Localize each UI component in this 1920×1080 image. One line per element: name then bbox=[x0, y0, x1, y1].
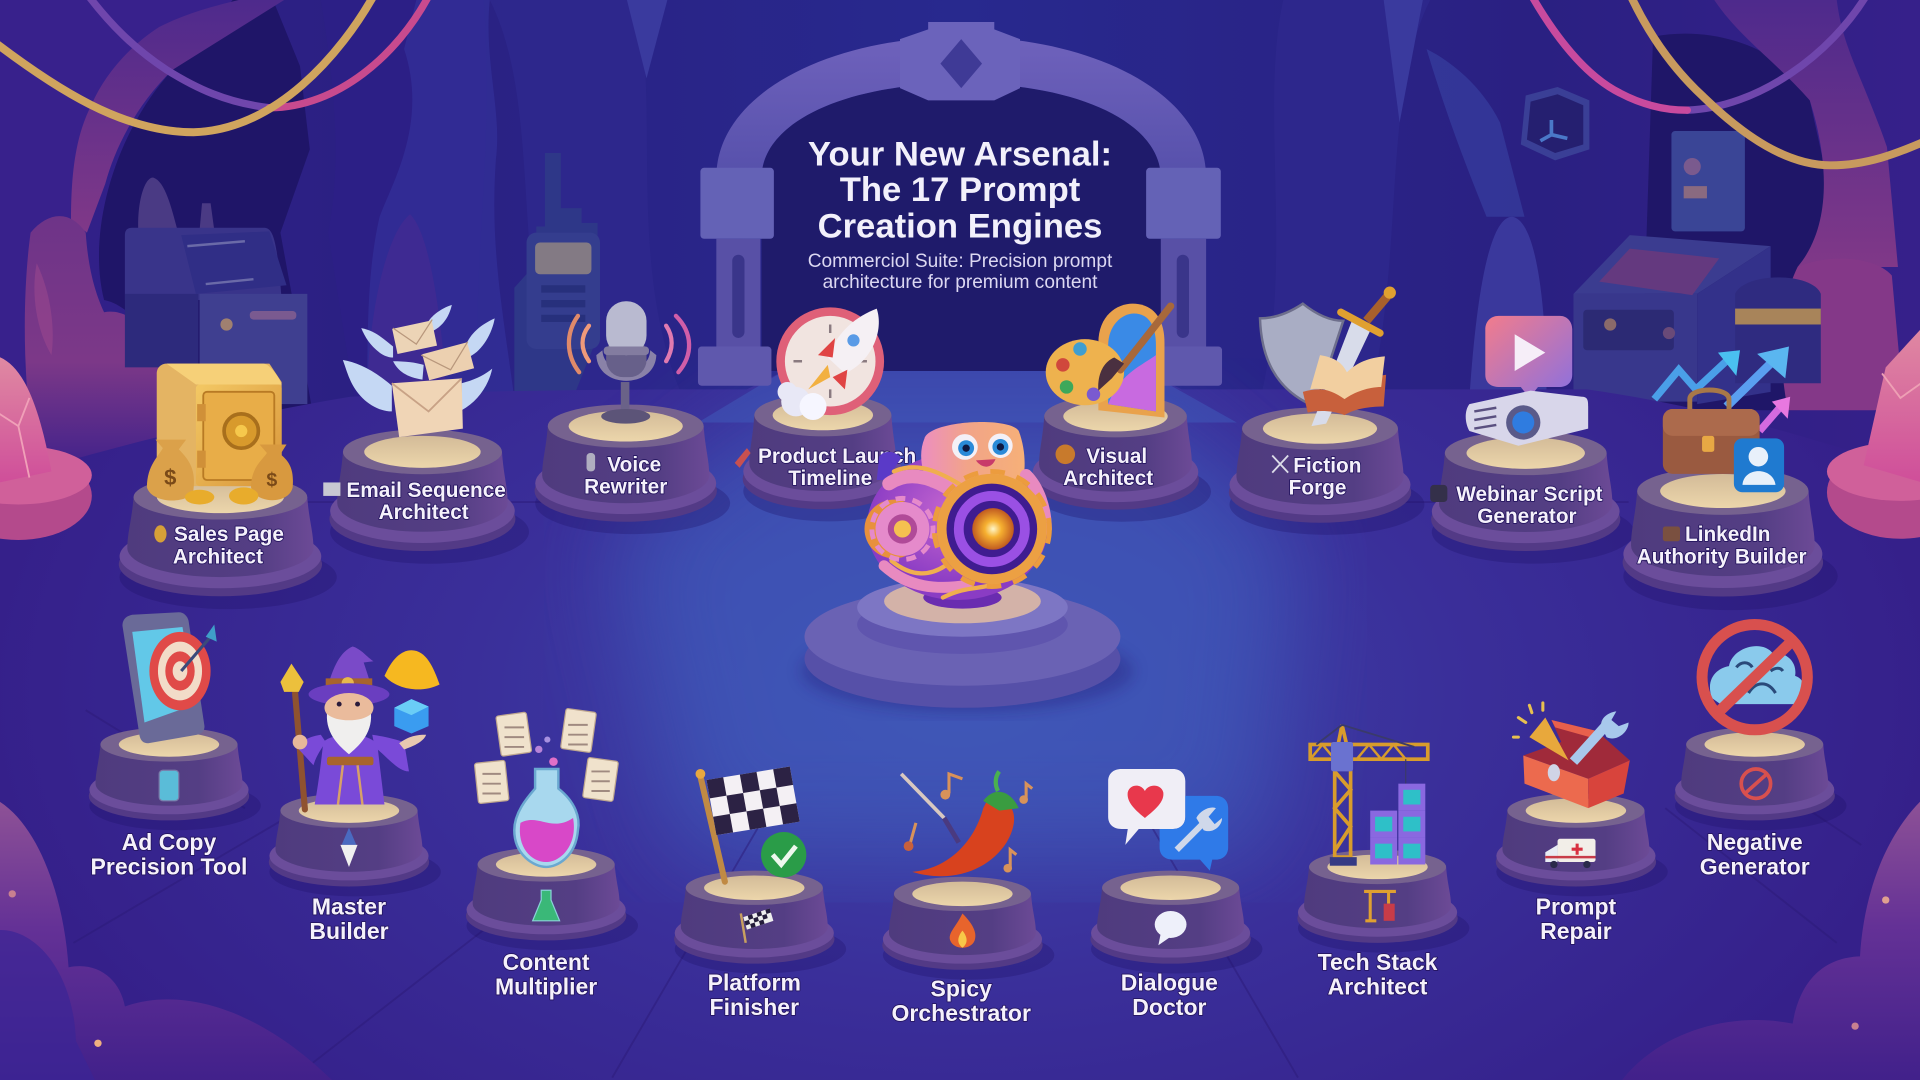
pedestal bbox=[1674, 727, 1847, 830]
hanging cables right bbox=[1531, 0, 1920, 165]
icon: cloud with prohibition sign bbox=[1702, 624, 1807, 730]
icon: small wizard bbox=[340, 828, 358, 867]
icon: wizard with helmet and cube bbox=[280, 647, 440, 809]
background machine: console right bbox=[1573, 131, 1821, 404]
label bbox=[1056, 444, 1153, 490]
label bbox=[154, 523, 284, 568]
label: Architect bbox=[379, 501, 469, 524]
subtitle: Commerciol Suite: Precision prompt bbox=[808, 251, 1113, 272]
icon: chili and baton with notes bbox=[901, 771, 1032, 876]
label: Dialogue bbox=[1121, 970, 1218, 996]
label: LinkedIn bbox=[1685, 523, 1771, 546]
label: Precision Tool bbox=[91, 853, 247, 879]
tool: Dialogue Doctor bbox=[1090, 769, 1262, 1020]
label bbox=[584, 453, 667, 498]
icon: potion flask and documents bbox=[474, 708, 618, 867]
label: Finisher bbox=[710, 994, 799, 1020]
label: Email Sequence bbox=[346, 479, 506, 502]
pedestal bbox=[1229, 407, 1424, 535]
icon: safe and money bags: $ bbox=[164, 465, 176, 490]
pedestal bbox=[119, 475, 337, 609]
tool: Visual Architect bbox=[1032, 304, 1211, 522]
pedestal bbox=[269, 793, 441, 896]
label: Prompt bbox=[1536, 894, 1617, 920]
icon: small chat bubble bbox=[1155, 911, 1187, 945]
label: Visual bbox=[1086, 445, 1147, 468]
icon: shield sword and book bbox=[1260, 287, 1396, 426]
pedestal bbox=[1431, 431, 1634, 564]
tool: Prompt Repair bbox=[1496, 703, 1668, 944]
label: Forge bbox=[1289, 477, 1346, 500]
tool: Master Builder bbox=[269, 647, 441, 944]
cloud left bbox=[0, 798, 338, 1080]
icon: safe and money bags: $ bbox=[266, 469, 277, 491]
icon: chat bubbles with heart and wrench bbox=[1108, 769, 1228, 871]
tool: Webinar Script Generator bbox=[1430, 316, 1634, 564]
tool: Voice Rewriter bbox=[535, 301, 730, 534]
floor bbox=[0, 371, 1920, 1080]
subtitle: architecture for premium content bbox=[823, 272, 1098, 293]
tool: Negative Generator bbox=[1674, 624, 1847, 879]
pedestal bbox=[743, 394, 915, 521]
label: Builder bbox=[309, 918, 389, 944]
pedestal bbox=[466, 847, 638, 950]
icon: small no sign bbox=[1741, 769, 1771, 798]
icon: briefcase and growth arrows bbox=[1654, 347, 1790, 492]
label bbox=[323, 479, 506, 524]
icon: microphone with sound waves bbox=[569, 301, 689, 424]
pedestal bbox=[1496, 793, 1668, 896]
pedestal bbox=[1623, 467, 1838, 610]
label: Product Launch bbox=[758, 445, 916, 468]
icon: winged envelopes bbox=[343, 305, 495, 437]
label: Sales Page bbox=[174, 523, 284, 546]
icon: small flame bbox=[950, 913, 975, 948]
icon: small phone bbox=[159, 770, 179, 801]
label: Tech Stack bbox=[1318, 949, 1438, 975]
pedestal bbox=[329, 429, 529, 564]
hanging cables left bbox=[0, 0, 430, 132]
tool: Ad Copy Precision Tool bbox=[89, 612, 261, 879]
icon: safe and money bags bbox=[147, 364, 293, 504]
label: Platform bbox=[708, 970, 801, 996]
label: Multiplier bbox=[495, 973, 597, 999]
icon: small flag bbox=[741, 908, 773, 943]
label: Timeline bbox=[788, 467, 872, 490]
crystal left bbox=[0, 355, 92, 540]
icon: small flask bbox=[533, 890, 560, 921]
label: Webinar Script bbox=[1456, 483, 1603, 506]
pedestal bbox=[1032, 395, 1211, 522]
central creature: brain engine mascot bbox=[864, 422, 1049, 609]
tool: Spicy Orchestrator bbox=[882, 771, 1054, 1026]
label: Generator bbox=[1700, 853, 1810, 879]
label: Spicy bbox=[931, 976, 992, 1002]
label: Master bbox=[312, 894, 386, 920]
label bbox=[1272, 455, 1361, 500]
icon: crane and building blocks bbox=[1310, 725, 1428, 866]
label: Content bbox=[503, 949, 590, 975]
label: Rewriter bbox=[584, 475, 667, 498]
label: Negative bbox=[1707, 829, 1803, 855]
label: Voice bbox=[607, 453, 661, 476]
tool: Platform Finisher bbox=[674, 767, 846, 1020]
tool: Sales Page Architect bbox=[119, 364, 337, 609]
crystal right bbox=[1827, 323, 1920, 539]
pedestal bbox=[89, 727, 261, 830]
label: Doctor bbox=[1132, 994, 1207, 1020]
icon: checkered flag and check badge bbox=[696, 767, 806, 882]
label: Orchestrator bbox=[892, 1000, 1031, 1026]
icon: small ambulance bbox=[1545, 839, 1596, 868]
label: Ad Copy bbox=[122, 829, 216, 855]
title: Your New Arsenal: bbox=[808, 135, 1112, 173]
icon: small crane bbox=[1364, 891, 1396, 921]
label: Authority Builder bbox=[1637, 545, 1807, 568]
label: Architect bbox=[1328, 973, 1428, 999]
background machine: printer left bbox=[125, 178, 307, 404]
title: Creation Engines bbox=[818, 208, 1102, 246]
background machine: clock right bbox=[1521, 87, 1589, 160]
pedestal bbox=[1090, 871, 1262, 973]
tool: Email Sequence Architect bbox=[323, 305, 529, 564]
icon: clock and rocket bbox=[776, 307, 884, 420]
label: Fiction bbox=[1293, 455, 1361, 478]
title: The 17 Prompt bbox=[840, 171, 1081, 209]
tool: Fiction Forge bbox=[1229, 287, 1424, 535]
tool: Tech Stack Architect bbox=[1297, 725, 1469, 999]
label: Architect bbox=[1063, 467, 1153, 490]
stone archway bbox=[698, 22, 1222, 386]
tool: LinkedIn Authority Builder bbox=[1623, 347, 1838, 610]
label bbox=[1637, 523, 1807, 568]
icon: video bubble and projector bbox=[1466, 316, 1588, 446]
label: Generator bbox=[1477, 505, 1577, 528]
icon: toolbox with wrench bbox=[1513, 703, 1630, 808]
central platform bbox=[801, 578, 1134, 713]
tool: Content Multiplier bbox=[466, 708, 638, 999]
label bbox=[735, 445, 916, 490]
pedestal bbox=[674, 871, 846, 973]
pedestal bbox=[535, 405, 730, 534]
pedestal bbox=[1297, 850, 1469, 953]
pedestal bbox=[882, 877, 1054, 980]
label bbox=[1430, 483, 1603, 528]
label: Architect bbox=[173, 545, 263, 568]
icon: palette and portal bbox=[1046, 304, 1171, 418]
tool: Product Launch Timeline bbox=[735, 307, 916, 521]
label: Repair bbox=[1540, 918, 1612, 944]
background machine: radio left bbox=[514, 153, 600, 392]
cloud right bbox=[1618, 796, 1920, 1080]
icon: phone with target bbox=[122, 612, 217, 743]
